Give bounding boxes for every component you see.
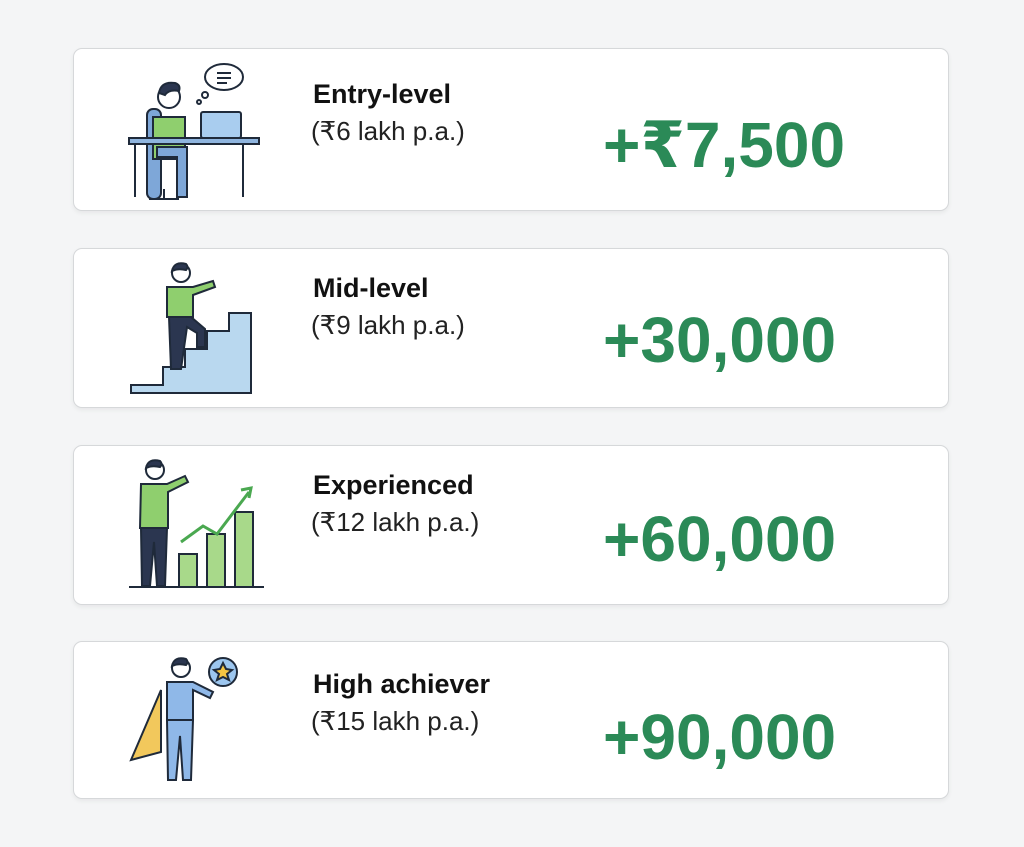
icon: person climbing stairs	[130, 262, 252, 394]
subtitle: (₹15 lakh p.a.)	[311, 706, 479, 736]
card: high achiever	[73, 641, 949, 799]
value: +90,000	[603, 701, 836, 773]
value: +₹7,500	[603, 109, 845, 181]
icon: person with growth chart	[129, 459, 264, 588]
title: Experienced	[313, 470, 474, 500]
title: High achiever	[313, 669, 490, 699]
value: +60,000	[603, 503, 836, 575]
value: +30,000	[603, 304, 836, 376]
subtitle: (₹12 lakh p.a.)	[311, 507, 479, 537]
subtitle: (₹6 lakh p.a.)	[311, 116, 465, 146]
title: Entry-level	[313, 79, 451, 109]
icon: superhero with star badge	[129, 657, 238, 781]
icon: person at desk with laptop	[128, 63, 260, 200]
card: mid-level	[73, 248, 949, 408]
card: entry-level	[73, 48, 949, 211]
card: experienced	[73, 445, 949, 605]
title: Mid-level	[313, 273, 429, 303]
subtitle: (₹9 lakh p.a.)	[311, 310, 465, 340]
